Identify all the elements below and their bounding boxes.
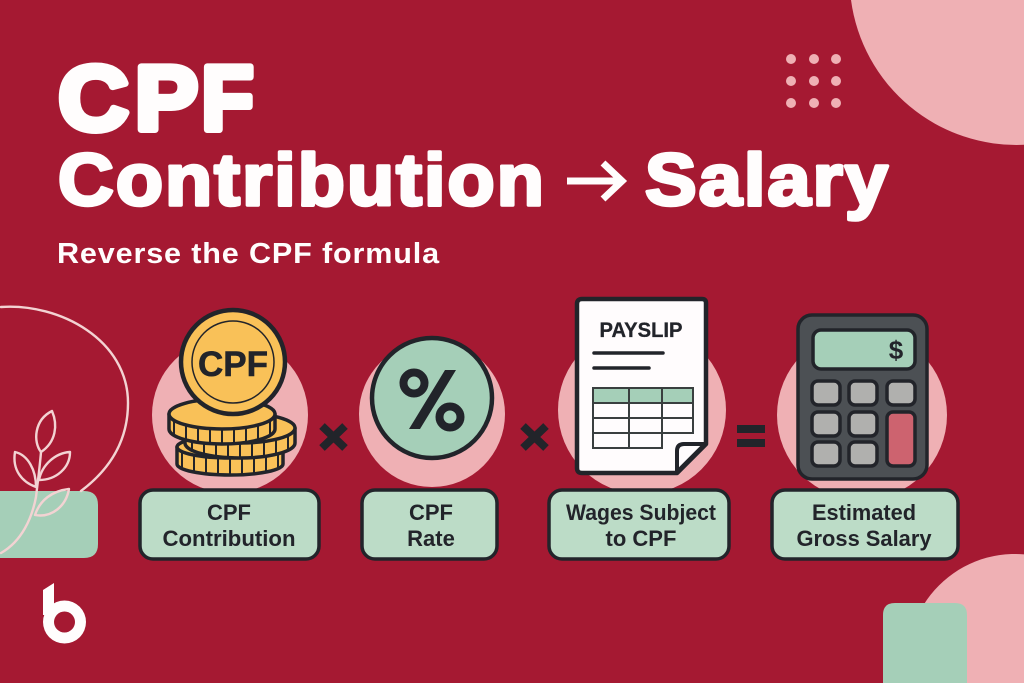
icon: payslip document: PAYSLIP (600, 319, 682, 342)
title: Salary (645, 140, 890, 221)
label: CPF Contribution (140, 490, 319, 559)
label: CPF Rate (362, 490, 497, 559)
title arrow (567, 163, 622, 199)
title: C (58, 48, 128, 150)
decorative shapes bottom right (883, 554, 1024, 683)
item: CPF contribution coins (152, 310, 308, 493)
label: CPF Contribution: CPF (207, 500, 251, 525)
label: Wages Subject to CPF: to CPF (606, 526, 676, 551)
icon: coin stack (169, 310, 295, 475)
item: payslip (558, 299, 726, 494)
label: CPF Rate: CPF (409, 500, 453, 525)
subtitle: Reverse the CPF formula (57, 238, 440, 270)
label: Wages Subject to CPF (549, 490, 729, 559)
item: CPF contribution coins: CPF (198, 345, 268, 384)
operator: times (523, 426, 546, 448)
operator: times (322, 426, 345, 448)
title: Contribution (58, 140, 546, 221)
decorative pink circle top right (851, 0, 1024, 145)
label: Estimated Gross Salary: Gross Salary (796, 526, 932, 551)
operator: equals (737, 429, 765, 443)
logo (43, 583, 86, 644)
item: calculator: $ (889, 335, 904, 365)
icon: percent badge (372, 338, 492, 458)
label: Estimated Gross Salary (772, 490, 958, 559)
label: CPF Contribution: Contribution (162, 526, 296, 551)
title (58, 48, 890, 221)
label: Wages Subject to CPF: Wages Subject (566, 500, 717, 525)
decorative green block and line art bottom left (0, 307, 128, 558)
item: calculator (777, 315, 947, 500)
icon: payslip document (577, 299, 706, 473)
item: CPF rate (359, 338, 505, 487)
title: P (135, 48, 198, 150)
label: CPF Rate: Rate (407, 526, 455, 551)
icon: calculator (798, 315, 927, 479)
title: F (202, 48, 254, 150)
dot grid (786, 54, 841, 108)
label: Estimated Gross Salary: Estimated (812, 500, 916, 525)
